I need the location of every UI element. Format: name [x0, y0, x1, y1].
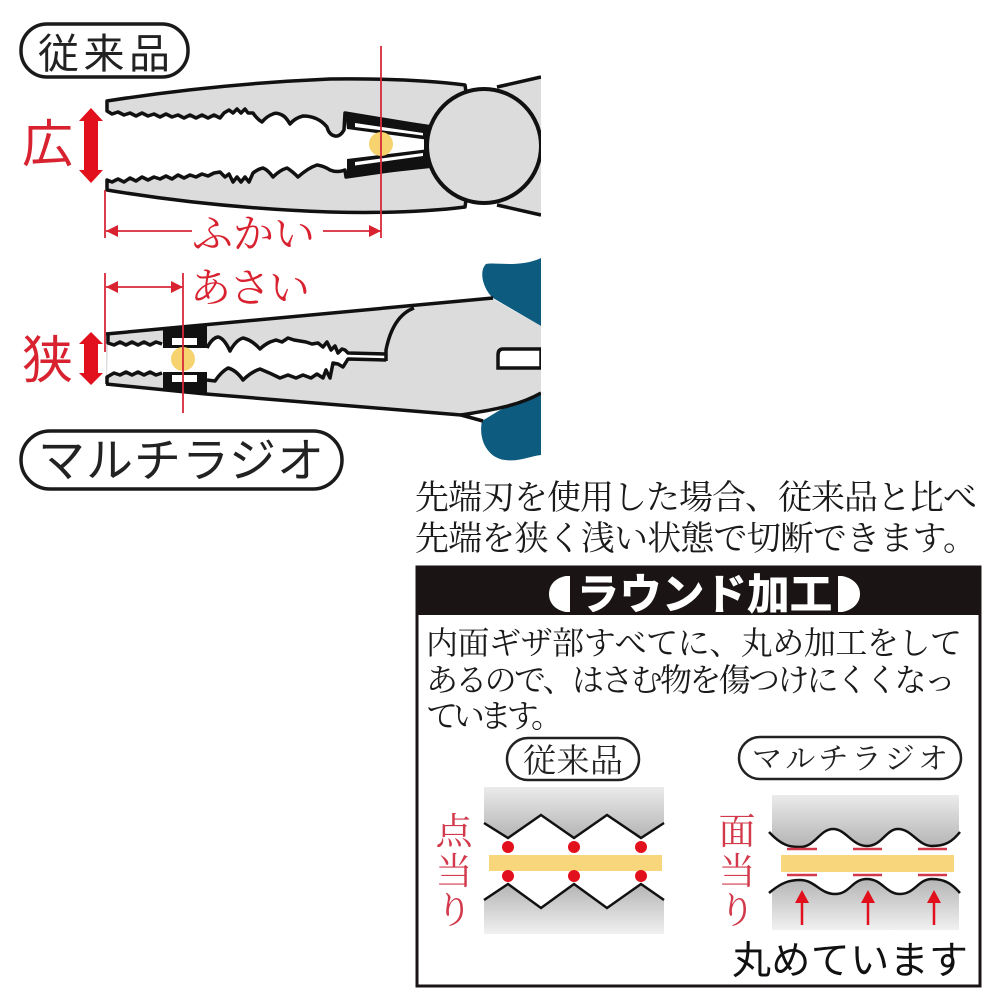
text: round processing description — [426, 625, 962, 734]
callout: rounded: 丸めています — [732, 940, 968, 983]
illustration: multi radio pliers — [106, 250, 553, 465]
label: conventional small pill — [507, 738, 639, 780]
diagram: point contact teeth — [484, 787, 664, 934]
label: surface contact — [718, 812, 756, 932]
panel: round processing — [416, 566, 981, 986]
text: round processing description: ています。 — [426, 698, 563, 734]
diagram: surface contact teeth — [769, 795, 960, 930]
label: surface contact: 面 — [718, 812, 756, 853]
label: point contact: 当 — [436, 851, 472, 893]
label: narrow opening: 狭 — [22, 332, 73, 389]
label: surface contact: 当 — [718, 851, 756, 893]
label: multi radio small pill — [739, 737, 961, 779]
label: conventional product pill: 従来品 — [38, 31, 170, 77]
text: tip blade description — [415, 479, 977, 558]
label: multi radio pill: マルチラジオ — [38, 434, 324, 487]
label: wide opening — [22, 108, 103, 183]
label: point contact — [436, 811, 474, 932]
header bar: ラウンド加工 — [577, 571, 832, 618]
label: conventional product pill — [21, 24, 188, 77]
label: point contact: り — [436, 891, 472, 932]
marker: cutting point conventional — [369, 132, 393, 156]
header bar — [416, 566, 981, 618]
label: point contact: 点 — [436, 811, 474, 853]
dimension: deep cutting length: ふかい — [192, 211, 315, 257]
marker: cutting point multi radio — [171, 347, 195, 371]
label: conventional small pill: 従来品 — [523, 743, 623, 780]
label: wide opening: 広 — [22, 116, 73, 173]
label: narrow opening — [22, 332, 103, 389]
text: round processing description: 内面ギザ部すべてに、丸め加工をして — [426, 625, 962, 661]
label: surface contact: り — [718, 891, 756, 932]
dimension: shallow cutting length: あさい — [190, 265, 310, 311]
text: tip blade description: 先端刃を使用した場合、従来品と比べ — [415, 479, 977, 517]
text: tip blade description: 先端を狭く浅い状態で切断できます。 — [415, 520, 977, 558]
illustration: conventional pliers — [107, 60, 553, 230]
text: round processing description: あるので、はさむ物を傷つけにくくなっ — [426, 662, 956, 698]
dimension: shallow cutting length — [105, 265, 310, 413]
dimension: deep cutting length — [105, 46, 381, 257]
label: multi radio small pill: マルチラジオ — [752, 743, 948, 776]
